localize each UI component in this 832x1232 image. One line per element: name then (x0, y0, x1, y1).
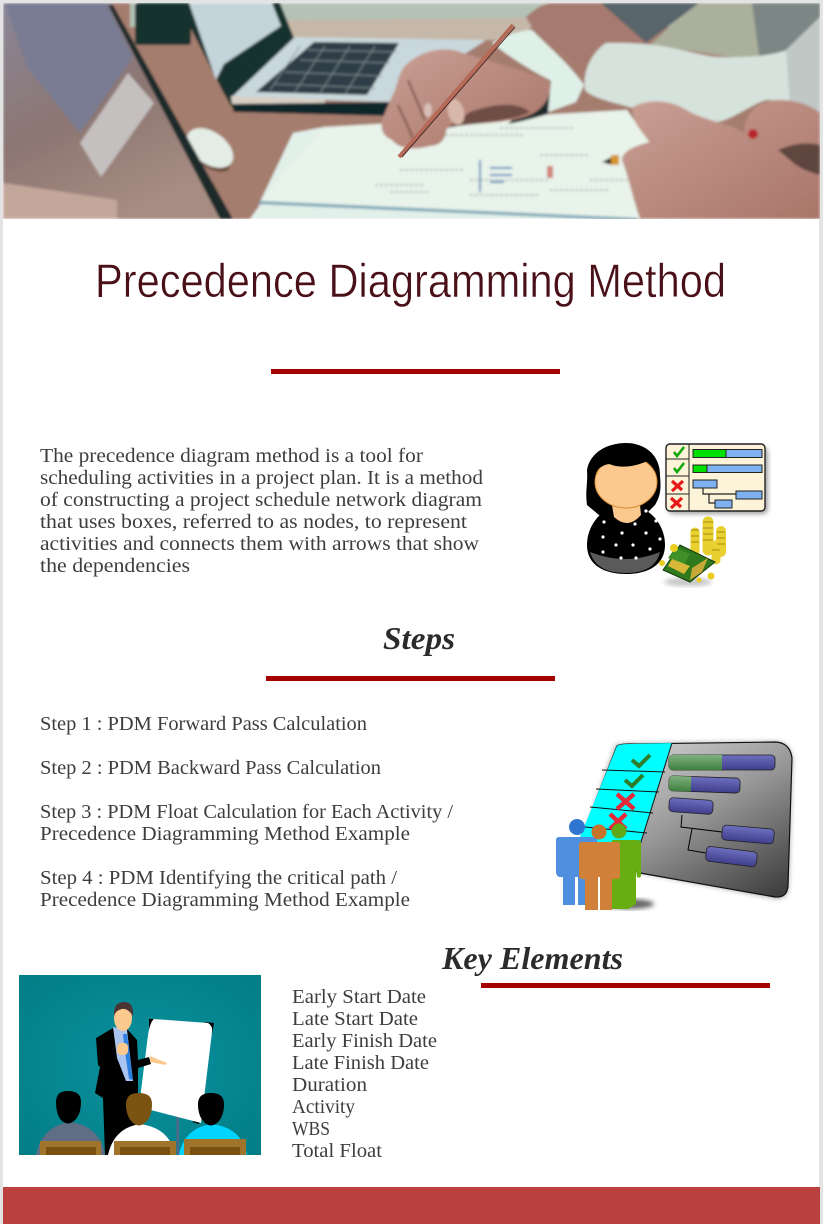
audience right (179, 1093, 247, 1155)
audience middle (108, 1093, 176, 1155)
steps list: Step 2 : PDM Backward Pass Calculation (40, 757, 381, 779)
key elements list: Duration (292, 1074, 367, 1096)
steps list: Step 4 : PDM Identifying the critical path / (40, 867, 397, 889)
steps list: Precedence Diagramming Method Example (40, 823, 410, 845)
key elements list: Activity (292, 1096, 356, 1118)
heading: Steps: Steps (383, 620, 455, 656)
intro paragraph (40, 445, 483, 577)
gantt board (578, 741, 793, 899)
title divider (271, 369, 560, 374)
title: Precedence Diagramming Method (95, 254, 726, 307)
steps list (40, 713, 453, 911)
illustration: presenter at flip chart with audience (19, 975, 261, 1155)
icon: team with gantt chart board (556, 741, 793, 910)
key elements list: Early Finish Date (292, 1030, 437, 1052)
key elements list: Total Float (292, 1140, 382, 1162)
key elements list (292, 986, 437, 1162)
flip chart (139, 1019, 214, 1155)
intro paragraph: scheduling activities in a project plan. It is a method (40, 467, 483, 489)
footer band (3, 1187, 820, 1224)
intro paragraph: of constructing a project schedule network diagram (40, 489, 482, 511)
money and coins (659, 522, 725, 586)
key elements list: Early Start Date (292, 986, 426, 1008)
hero photo: hands working over laptop and papers (3, 3, 820, 221)
intro paragraph: activities and connects them with arrows that show (40, 533, 479, 555)
intro paragraph: the dependencies (40, 555, 190, 577)
key elements list: Late Finish Date (292, 1052, 429, 1074)
key elements list: WBS (292, 1118, 330, 1140)
heading: Key Elements: Key Elements (441, 940, 623, 976)
icon: manager with schedule chart and money (586, 443, 768, 586)
woman figure (586, 443, 665, 574)
steps divider (266, 676, 555, 681)
key elements list: Late Start Date (292, 1008, 418, 1030)
intro paragraph: that uses boxes, referred to as nodes, to represent (40, 511, 467, 533)
steps list: Precedence Diagramming Method Example (40, 889, 410, 911)
team of three (556, 819, 654, 910)
steps list: Step 3 : PDM Float Calculation for Each Activity / (40, 801, 453, 823)
audience left (36, 1091, 105, 1155)
intro paragraph: The precedence diagram method is a tool for (40, 445, 423, 467)
steps list: Step 1 : PDM Forward Pass Calculation (40, 713, 367, 735)
key elements divider (481, 983, 770, 988)
gantt card (666, 444, 768, 514)
presenter (95, 1002, 167, 1155)
